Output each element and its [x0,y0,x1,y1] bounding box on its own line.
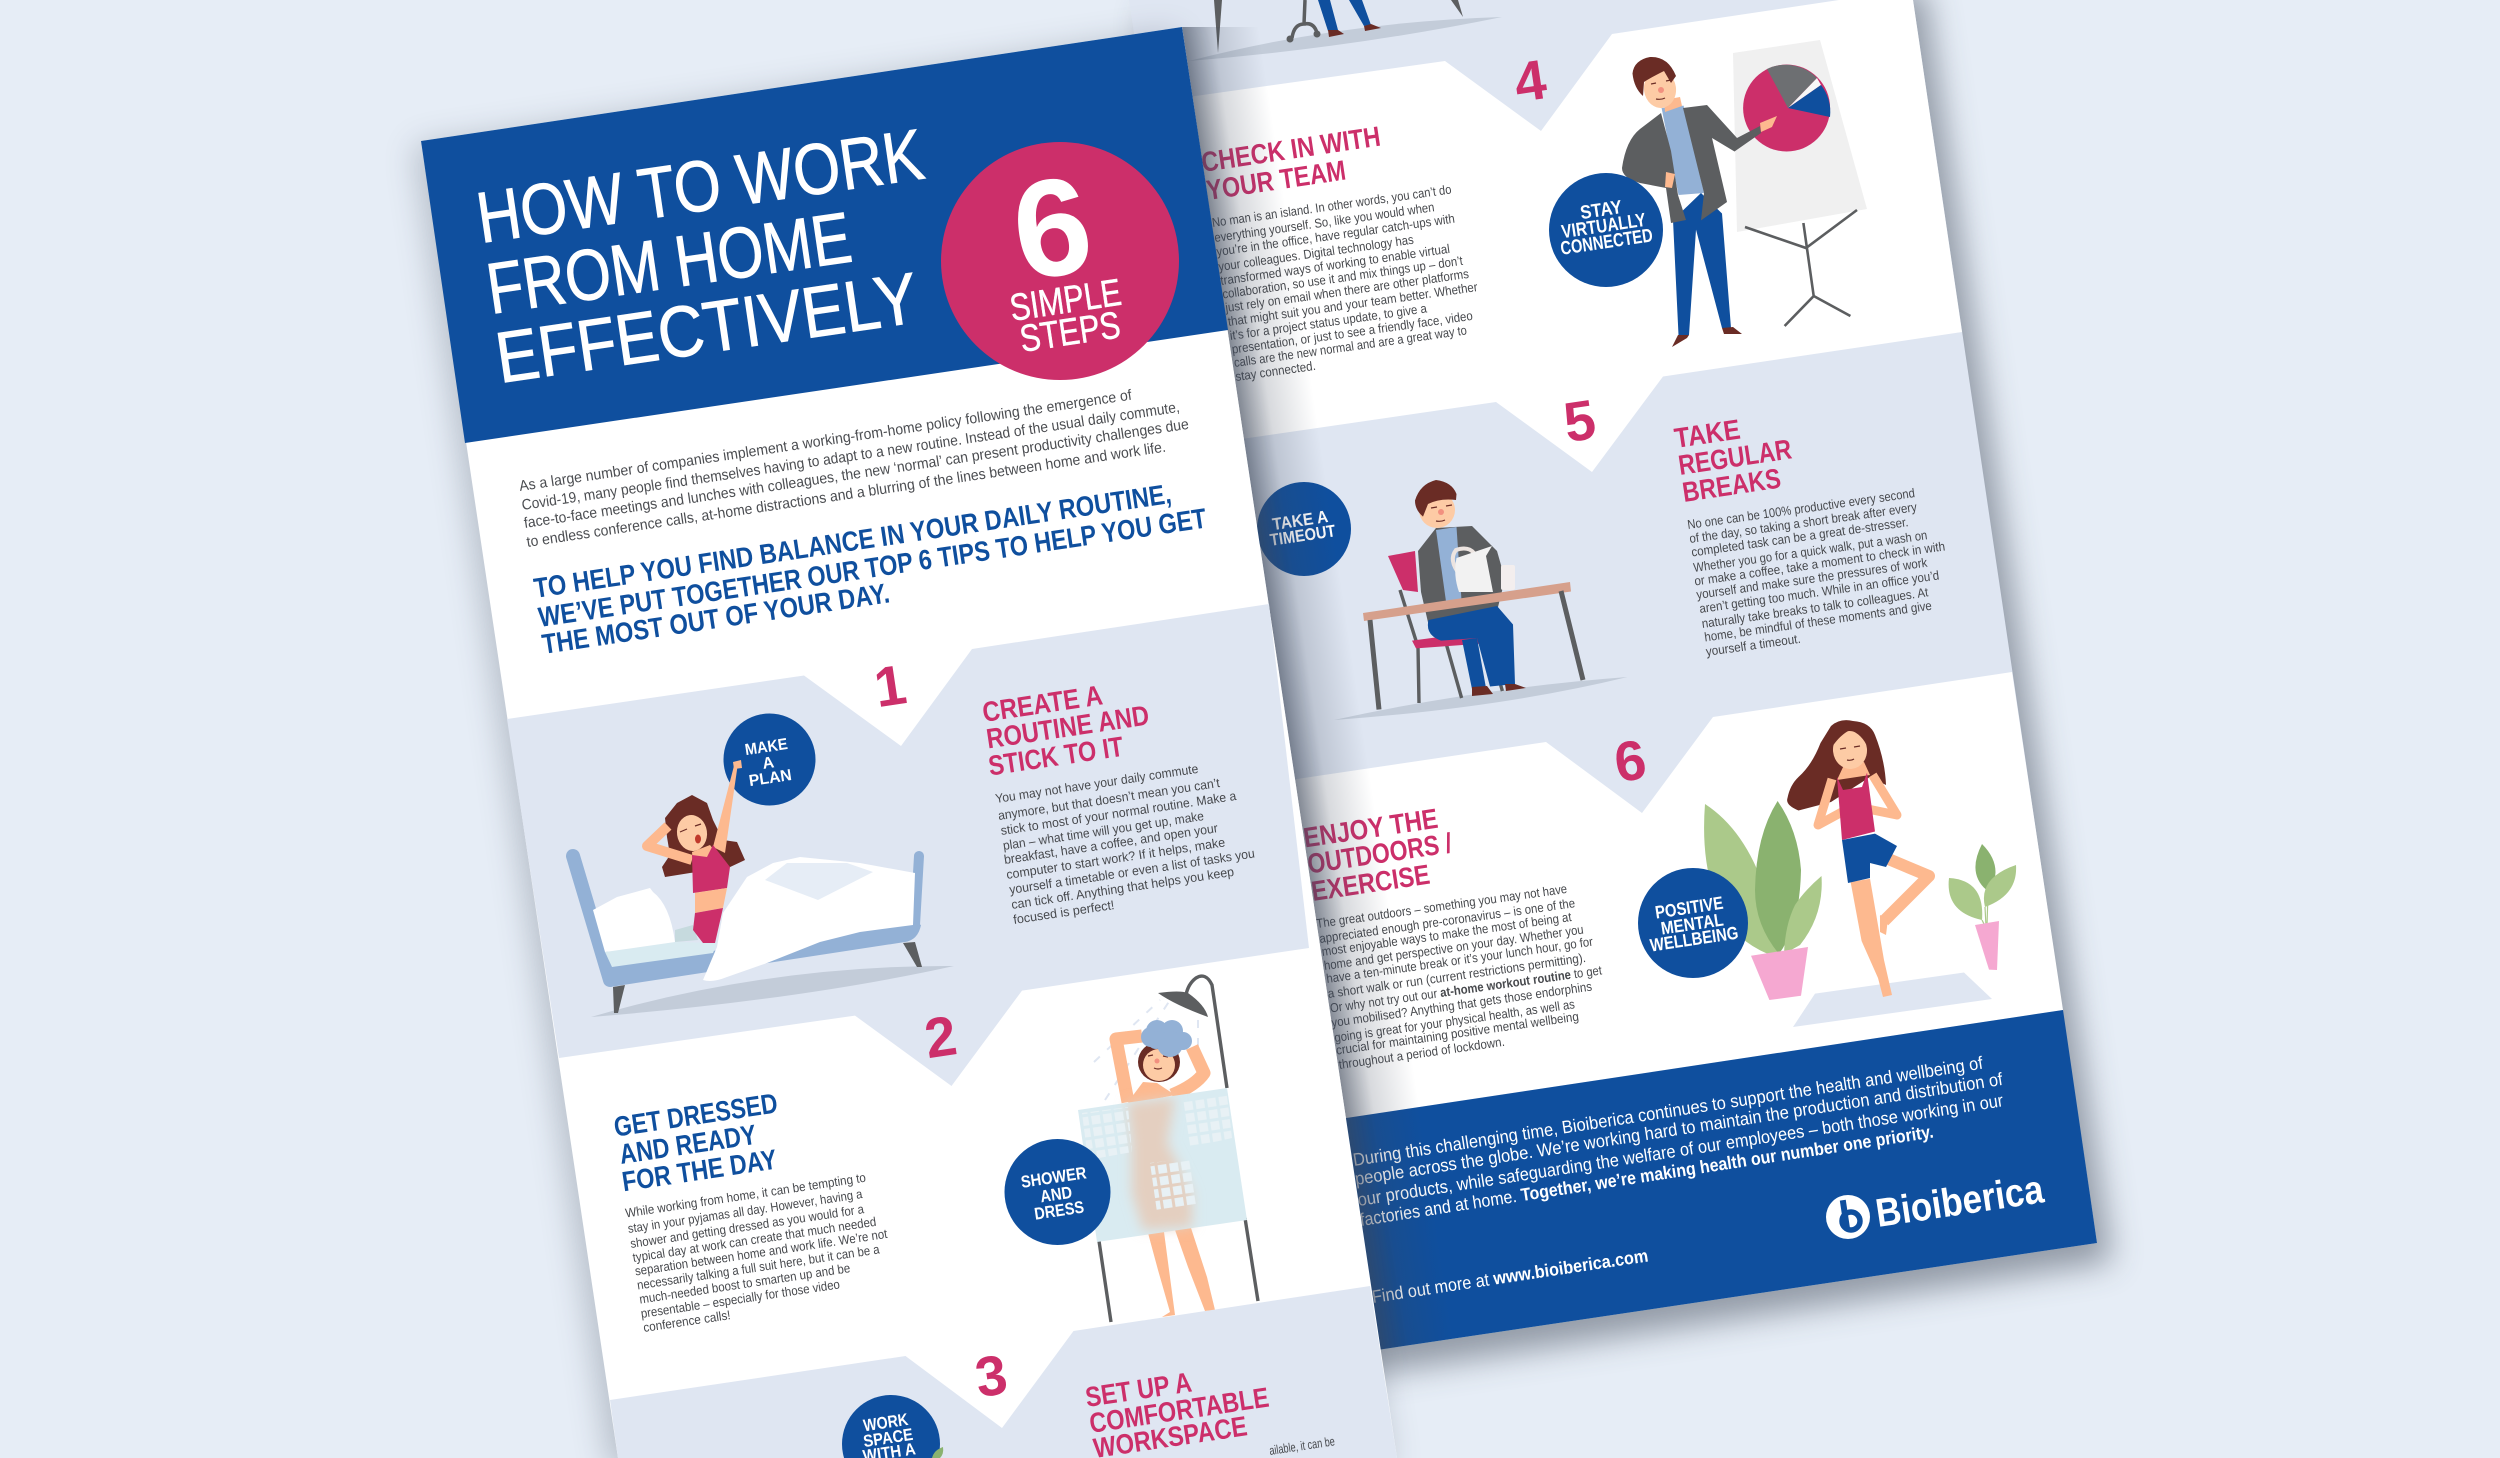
step 2 body text: much-needed boost to smarten up and be [638,1260,851,1307]
step 5 heading [1672,414,1794,508]
step 6 body text: Or why not try out our at-home workout routine to get [1329,962,1603,1015]
step 4 body text: transformed ways of working to enable virtual [1219,241,1451,288]
plant leaf fragment [932,1447,943,1458]
badge: stay virtually connected [1549,173,1663,287]
panel: step 6 white section [1250,672,2063,1128]
step 1 heading: STICK TO IT [986,731,1125,782]
title: FROM HOME [482,198,856,330]
panel: footer [1280,1010,2097,1357]
step 4 body text: presentation, or just to see a friendly face, video [1231,308,1474,357]
Bioiberica logo [1826,1167,2047,1239]
step 3 heading: SET UP A [1083,1366,1194,1413]
badge: stay virtually connected: STAY [1579,197,1624,224]
step 5 number: 5 [1560,387,1600,454]
step 4 body text: it’s for a project status update, to give a [1229,300,1428,343]
badge: positive mental wellbeing: WELLBEING [1649,923,1740,956]
footer text: During this challenging time, Bioiberica continues to support the health and wellbeing of [1352,1053,1985,1170]
step 2 body text: shower and getting dressed as you would for a [629,1201,866,1251]
step 6 body text: have a ten-minute break or it’s your lunch hour, go for [1325,934,1594,986]
badge: 6 simple steps: SIMPLE [1007,272,1124,330]
step 3 heading: COMFORTABLE [1087,1382,1271,1439]
step 3 heading [1083,1366,1271,1458]
step 2 body text: conference calls! [642,1307,731,1335]
step 5 body text: yourself and make sure the pressures of work [1695,555,1929,602]
step 4 body text: just rely on email when there are other platforms [1223,266,1470,315]
title: HOW TO WORK [472,115,929,259]
badge: work space with a [842,1395,940,1458]
step 6 heading: OUTDOORS / [1305,827,1454,880]
step 3 number: 3 [971,1342,1011,1409]
intro text: As a large number of companies implement a working-from-home policy following the emergence of [518,387,1134,495]
step 5 body text: completed task can be a great de-stresser. [1690,514,1909,559]
step 4 heading: YOUR TEAM [1204,155,1348,206]
step 5 body text: yourself a timeout. [1705,631,1801,659]
step 1 heading: CREATE A [980,679,1105,728]
footer text: people across the globe. We’re working hard to maintain the production and distribution of [1354,1069,2005,1189]
step 1 body text: stick to most of your normal routine. Make a [1000,788,1238,838]
badge: shower and dress: AND [1039,1183,1073,1206]
title: EFFECTIVELY [491,258,923,399]
step 5 heading: BREAKS [1680,463,1783,508]
step 6 heading [1301,803,1454,907]
badge: positive mental wellbeing [1638,868,1748,978]
back page [1129,0,2112,1458]
front page [414,27,1397,1458]
step 2 body text [624,1170,889,1335]
step 1 heading: ROUTINE AND [984,700,1151,754]
subheading: TO HELP YOU FIND BALANCE IN YOUR DAILY ROUTINE, [532,478,1173,604]
step 1 body text: breakfast, have a coffee, and open your [1003,820,1219,867]
footer text [1352,1053,2005,1230]
step 5 body text: or make a coffee, take a moment to check in with [1693,538,1946,588]
footer link: Find out more at www.bioiberica.com [1371,1245,1649,1307]
footer text: factories and at home. Together, we’re making health our number one priority. [1359,1121,1935,1230]
step 3 body text fragment: ailable, it can be [1268,1433,1336,1458]
badge: take a timeout: TIMEOUT [1269,521,1337,550]
badge: shower and dress: DRESS [1033,1197,1085,1224]
step 4 body text: No man is an island. In other words, you can’t do [1211,181,1452,230]
step 6 body text: throughout a period of lockdown. [1338,1034,1506,1072]
badge: 6 simple steps [941,142,1179,380]
panel: header [421,27,1228,443]
step 5 body text: of the day, so taking a short break after every [1688,499,1918,546]
step 6 body text: home and get perspective on your day. Whether you [1323,922,1584,973]
step 1 number: 1 [870,652,910,719]
badge: make a plan: A [761,754,776,773]
step 6 body text: The great outdoors – something you may not have [1315,881,1568,931]
step 2 heading: FOR THE DAY [620,1144,779,1197]
step 1 body text: anymore, but that doesn’t mean you can’t [997,775,1221,823]
step 6 heading: ENJOY THE [1301,803,1440,853]
badge: make a plan: MAKE [744,736,789,759]
step 5 body text: aren’t getting too much. While in an office you’d [1698,567,1940,616]
badge: make a plan: PLAN [748,767,793,790]
step 1 body text: can tick off. Anything that helps you keep [1010,864,1235,912]
step 5 body text: No one can be 100% productive every second [1686,485,1916,532]
badge: positive mental wellbeing: POSITIVE [1654,893,1724,923]
step 5 body text: Whether you go for a quick walk, put a wash on [1692,527,1928,575]
step 6 body text: you mobilised? Anything that gets those endorphins [1330,979,1593,1030]
subheading: WE’VE PUT TOGETHER OUR TOP 6 TIPS TO HELP YOU GET [536,503,1208,633]
step 1 body text: yourself a timetable or even a list of tasks you [1008,845,1256,897]
illustration: woman in yoga pose with plants [1704,720,2016,1027]
step 2 heading [612,1087,780,1197]
Bioiberica logo: Bioiberica [1873,1167,2047,1236]
infographic mockup: two overlapping tilted pages [404,0,2128,1458]
badge: shower and dress [1004,1139,1110,1245]
step 4 body text: stay connected. [1234,358,1317,384]
step 1 body text: You may not have your daily commute [994,761,1199,806]
panel: step 3 section [610,1286,1397,1458]
step 2 heading: GET DRESSED [612,1087,780,1143]
badge: take a timeout [1257,482,1351,576]
step 6 body text: appreciated enough pre-coronavirus – is one of the [1318,895,1576,946]
step 2 body text: stay in your pyjamas all day. However, having a [627,1186,864,1236]
step 6 body text: most enjoyable ways to make the most of being at [1321,909,1573,959]
intro text: face-to-face meetings and lunches with colleagues, the new ‘normal’ can present productivity challenges due [523,416,1190,532]
badge: make a plan [724,714,816,806]
badge: 6 simple steps: STEPS [1017,304,1123,361]
step 5 heading: REGULAR [1676,433,1794,481]
remnant of step 3 illustration [1189,0,1502,61]
step 4 heading [1199,121,1382,206]
illustration: woman waking in bed [573,760,954,1017]
footer text: our products, while safeguarding the welfare of our employees – both those working in our [1356,1090,2005,1210]
step 4 body text: calls are the new normal and are a great way to [1233,322,1468,370]
illustration: man presenting pie chart [1622,40,1867,347]
step 6 body text [1315,881,1603,1072]
step 6 body text: going is great for your physical health, as well as [1333,996,1576,1045]
step 2 body text: presentable – especially for those video [640,1276,841,1321]
step 1 body text [994,761,1256,927]
step 2 body text: typical day at work can create that much needed [632,1214,877,1265]
illustration: man with coffee at desk [1334,480,1628,720]
subheading: THE MOST OUT OF YOUR DAY. [540,577,892,660]
step 4 body text: collaboration, so use it and mix things up – don’t [1221,253,1464,301]
step 5 body text: naturally take breaks to talk to colleagues. At [1701,584,1929,631]
step 1 body text: plan – what time will you get up, make [1002,808,1205,853]
step 6 body text: crucial for maintaining positive mental wellbeing [1335,1009,1580,1058]
step 5 heading: TAKE [1672,414,1742,454]
step 6 body text: a short walk or run (current restrictions permitting). [1327,950,1587,1001]
step 4 heading: CHECK IN WITH [1199,121,1382,178]
badge: work space with a: WORK [862,1410,910,1435]
step 5 body text [1686,485,1946,659]
badge: 6 simple steps: 6 [1003,147,1101,310]
badge: stay virtually connected: CONNECTED [1559,225,1654,260]
badge: shower and dress: SHOWER [1020,1163,1088,1192]
step 2 body text: necessarily talking a full suit here, but it can be a [636,1241,881,1292]
step 4 body text: you’re in the office, have regular catch-ups with [1215,211,1456,259]
panel: step 2 number: 2 [920,1003,961,1070]
panel: step 4 white section [1160,0,1962,472]
panel: step 1 section [507,604,1309,1086]
step 2 heading: AND READY [617,1119,759,1170]
step 2 body text: While working from home, it can be tempting to [624,1170,867,1220]
step 1 heading [980,679,1151,782]
step 4 body text: that might suit you and your team better. Whether [1227,279,1479,329]
badge: positive mental wellbeing: MENTAL [1659,910,1725,939]
intro text: to endless conference calls, at-home distractions and a blurring of the lines between home and work life. [525,439,1167,551]
title [472,115,929,399]
step 4 body text [1211,181,1479,384]
step 4 body text: everything yourself. So, like you would when [1213,199,1435,245]
step 1 body text: computer to start work? If it helps, make [1005,834,1226,882]
badge: take a timeout: TAKE A [1271,507,1329,534]
step 4 number: 4 [1510,47,1550,114]
badge: work space with a: SPACE [862,1425,914,1451]
intro text: Covid-19, many people find themselves having to adapt to a new routine. Instead of the usual daily commute, [521,399,1181,514]
badge: stay virtually connected: VIRTUALLY [1560,210,1648,243]
step 5 body text: home, be mindful of these moments and give [1703,598,1933,644]
step 6 number: 6 [1610,727,1650,794]
illustration: woman in shower [1078,976,1258,1322]
step 2 body text: separation between home and work life. We’re not [634,1226,889,1278]
step 1 body text: focused is perfect! [1012,897,1115,927]
step 4 body text: your colleagues. Digital technology has [1217,232,1415,274]
step 6 heading: EXERCISE [1309,859,1432,907]
